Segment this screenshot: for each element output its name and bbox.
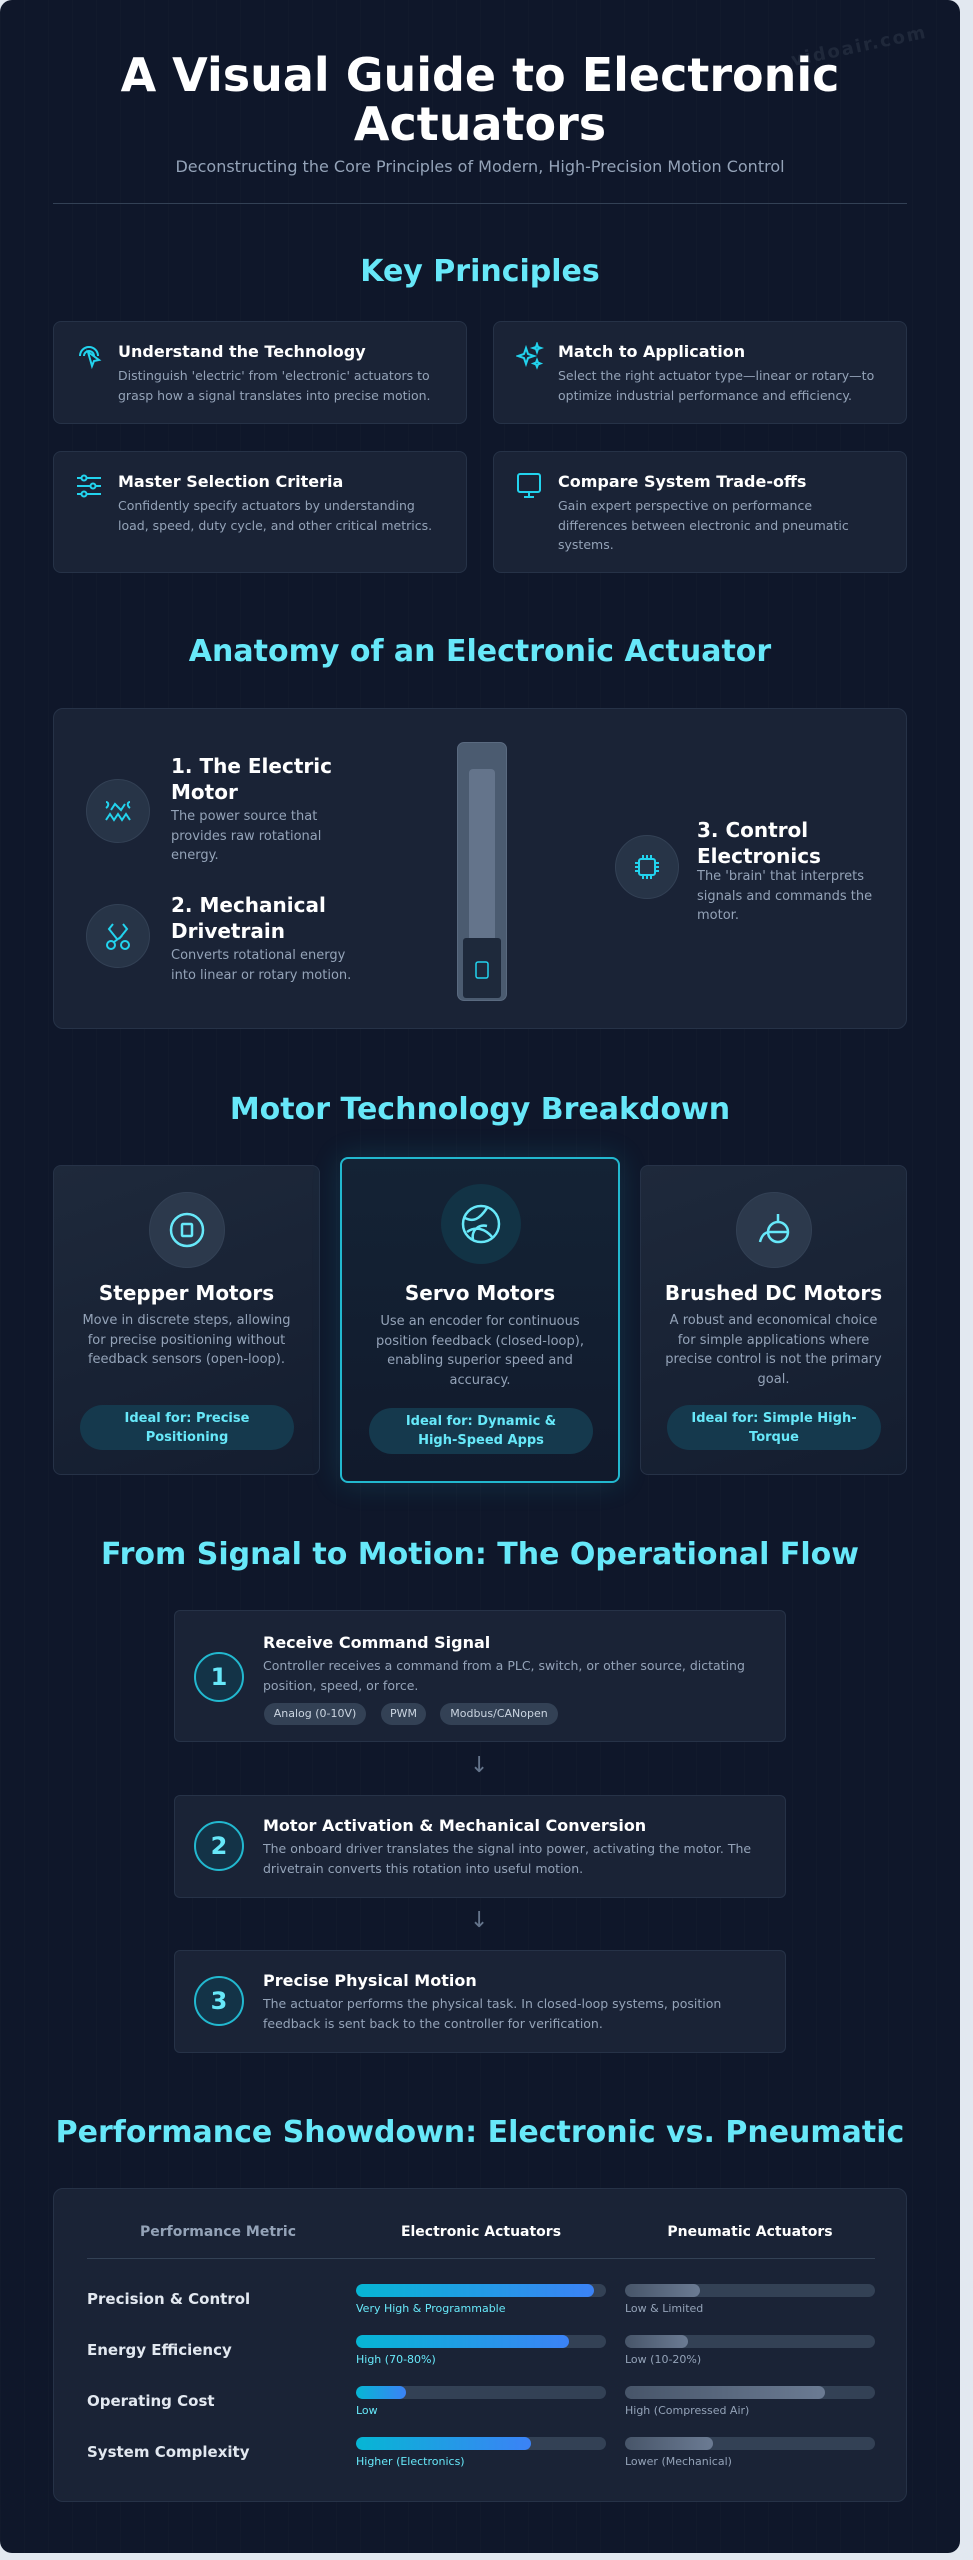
panel: anatomy — [53, 708, 907, 1029]
card: servo (highlighted): High-Speed Apps — [418, 1433, 544, 1448]
icon: stepper — [149, 1192, 225, 1268]
step 3: The actuator performs the physical task. In closed-loop systems, position feedback is sent back to the controller for verification. — [263, 1996, 721, 2030]
row: complexity: Higher (Electronics) — [356, 2455, 465, 2468]
heading: performance: Performance Showdown: Electronic vs. Pneumatic — [56, 2115, 904, 2150]
part 2: drivetrain: Converts rotational energy into linear or rotary motion. — [171, 948, 351, 982]
card: stepper: Positioning — [146, 1430, 228, 1444]
step 2: Motor Activation & Mechanical Conversion — [263, 1816, 646, 1835]
icon: monitor — [517, 473, 541, 498]
row: complexity: Lower (Mechanical) — [625, 2455, 732, 2468]
tags — [264, 1703, 366, 1725]
card: master selection criteria: Confidently specify actuators by understanding load, speed, duty cycle, and other critical metrics. — [118, 498, 432, 532]
step 2: The onboard driver translates the signal into power, activating the motor. The drivetrain converts this rotation into useful motion. — [263, 1841, 751, 1876]
part 2: drivetrain — [86, 893, 351, 982]
row: energy: High (70-80%) — [356, 2353, 436, 2366]
card: understand the technology: Understand the Technology — [118, 342, 366, 361]
heading: anatomy: Anatomy of an Electronic Actuator — [189, 634, 771, 669]
row: precision: Precision & Control — [87, 2290, 250, 2308]
step 1: 1 — [211, 1663, 227, 1691]
part 1: electric motor: The power source that provides raw rotational energy. — [171, 809, 321, 863]
card: compare system trade-offs: Compare System Trade-offs — [558, 472, 806, 491]
card: servo (highlighted): Servo Motors — [405, 1281, 555, 1305]
icon: sparkles — [516, 342, 544, 370]
icon: motor — [86, 779, 150, 843]
row: operating cost: High (Compressed Air) — [625, 2404, 749, 2417]
heading: operational flow: From Signal to Motion: The Operational Flow — [101, 1537, 859, 1572]
table header — [140, 2224, 833, 2240]
row: energy: Energy Efficiency — [87, 2341, 232, 2359]
step 1 — [174, 1610, 786, 1742]
heading: key principles: Key Principles — [360, 254, 600, 289]
actuator diagram — [457, 742, 507, 1001]
step 1: Receive Command Signal — [263, 1633, 490, 1652]
icon: sliders — [77, 474, 101, 498]
card: match to application: Match to Application — [558, 342, 745, 361]
step 1: Modbus/CANopen — [450, 1707, 548, 1720]
part 3: control electronics: Electronics — [697, 844, 821, 868]
title: Actuators — [354, 97, 606, 151]
step 1: PWM — [390, 1707, 417, 1720]
card: stepper: Ideal for: Precise — [125, 1410, 249, 1426]
card: master selection criteria: Master Selection Criteria — [118, 472, 343, 491]
card: compare system trade-offs — [493, 451, 907, 573]
card: brushed DC: Ideal for: Simple High- — [691, 1410, 857, 1426]
part 1: electric motor — [86, 754, 332, 863]
table header: Pneumatic Actuators — [667, 2224, 833, 2240]
icon: signal pointer — [79, 346, 102, 369]
card: understand the technology — [53, 321, 467, 424]
card: stepper: Stepper Motors — [99, 1281, 274, 1305]
card: servo (highlighted): Use an encoder for continuous position feedback (closed-loop), enabling superior speed and accuracy. — [376, 1314, 584, 1388]
step 3: 3 — [211, 1987, 227, 2015]
step 2: 2 — [211, 1832, 227, 1860]
row: operating cost: Operating Cost — [87, 2392, 215, 2410]
card: stepper — [53, 1165, 320, 1475]
row: operating cost — [87, 2386, 875, 2417]
card: match to application: Select the right actuator type—linear or rotary—to optimize industrial performance and efficiency. — [558, 368, 874, 402]
table header: Performance Metric — [140, 2224, 296, 2240]
tags: Analog (0-10V) — [274, 1707, 356, 1720]
part 3: control electronics — [615, 818, 872, 923]
row: precision: Very High & Programmable — [356, 2302, 506, 2315]
panel: comparison table — [53, 2188, 907, 2502]
icon: brushed dc — [736, 1192, 812, 1268]
card: brushed DC: Brushed DC Motors — [665, 1281, 882, 1305]
card: stepper: Move in discrete steps, allowing for precise positioning without feedback sensors (open-loop). — [82, 1313, 291, 1367]
icon: wrench — [86, 904, 150, 968]
card: match to application — [493, 321, 907, 424]
card: compare system trade-offs: Gain expert perspective on performance differences between electronic and pneumatic systems. — [558, 498, 849, 552]
arrow: ↓ — [470, 1753, 488, 1778]
card: brushed DC — [640, 1165, 907, 1475]
title: A Visual Guide to Electronic — [121, 48, 839, 102]
icon: chip — [615, 835, 679, 899]
part 3: control electronics: 3. Control — [697, 818, 808, 842]
card: servo (highlighted): Ideal for: Dynamic & — [406, 1414, 556, 1429]
card: understand the technology: Distinguish 'electric' from 'electronic' actuators to grasp how a signal translates into precise motion. — [118, 368, 431, 402]
part 3: control electronics: The 'brain' that interprets signals and commands the motor. — [697, 869, 872, 923]
title — [120, 48, 839, 151]
table header: Electronic Actuators — [401, 2224, 561, 2240]
row: complexity: System Complexity — [87, 2443, 249, 2461]
step 3 — [174, 1950, 786, 2053]
card: brushed DC: A robust and economical choice for simple applications where precise control is not the primary goal. — [665, 1313, 882, 1386]
part 2: drivetrain: Drivetrain — [171, 919, 285, 943]
heading: motor technology: Motor Technology Breakdown — [230, 1092, 730, 1127]
card: brushed DC: Torque — [749, 1430, 799, 1444]
arrow: ↓ — [470, 1908, 488, 1933]
row: precision: Low & Limited — [625, 2302, 703, 2315]
step 2 — [174, 1795, 786, 1898]
step 1: Controller receives a command from a PLC, switch, or other source, dictating position, speed, or force. — [263, 1658, 745, 1692]
part 1: electric motor: 1. The Electric — [171, 754, 332, 778]
part 2: drivetrain: 2. Mechanical — [171, 893, 326, 917]
row: operating cost: Low — [356, 2404, 378, 2417]
subtitle: Deconstructing the Core Principles of Modern, High-Precision Motion Control — [175, 157, 785, 176]
part 1: electric motor: Motor — [171, 780, 238, 804]
row: precision — [87, 2284, 875, 2315]
row: energy: Low (10-20%) — [625, 2353, 701, 2366]
card: servo (highlighted) — [340, 1157, 620, 1483]
row: energy — [87, 2335, 875, 2366]
row: complexity — [87, 2437, 875, 2468]
card: master selection criteria — [53, 451, 467, 573]
icon: servo — [441, 1184, 521, 1264]
watermark: vidoair.com — [789, 22, 929, 71]
step 3: Precise Physical Motion — [263, 1971, 477, 1990]
